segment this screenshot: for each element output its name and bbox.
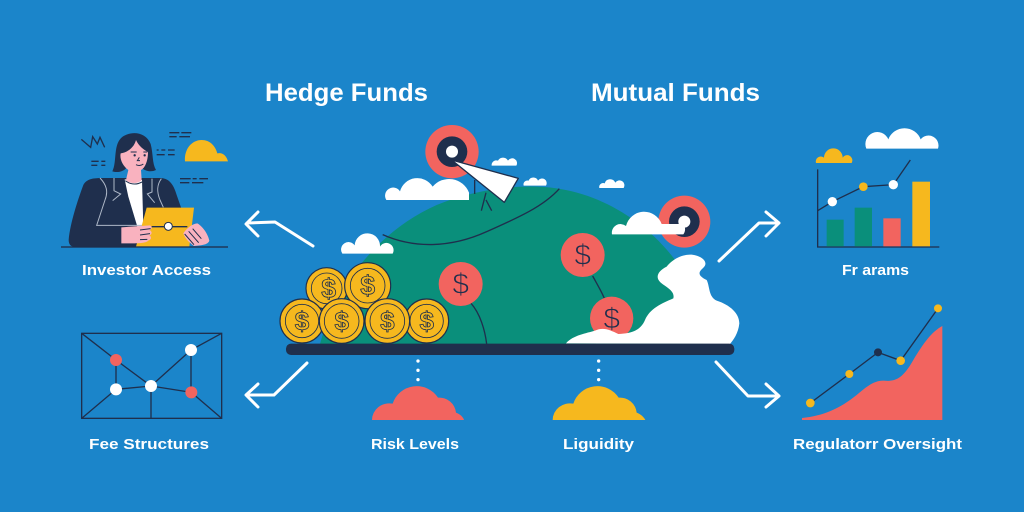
- dollar badges: $: [603, 302, 620, 335]
- white blob cloud: [566, 255, 739, 344]
- coin front 3: $: [380, 306, 395, 336]
- clouds: [816, 128, 938, 163]
- arrow: to investor access: [246, 212, 313, 246]
- clouds: small: [341, 158, 624, 254]
- woman hair: [112, 133, 156, 172]
- label: Investor Access: Investor Access: [82, 262, 211, 279]
- network lines: [82, 333, 222, 418]
- panel: risk levels: [372, 359, 464, 420]
- coin front 2: $: [334, 306, 349, 336]
- icon: doodle squiggle: [81, 137, 105, 165]
- arrow: to regulatory oversight: [716, 362, 779, 407]
- title: Mutual Funds: Mutual Funds: [591, 79, 760, 107]
- icon: text dashes: [157, 133, 208, 183]
- icon: yellow cloud: [185, 140, 228, 161]
- label: Fr arams: Fr arams: [842, 262, 909, 279]
- panel: liquidity: [553, 359, 645, 420]
- dotted connector: [416, 359, 420, 381]
- coin back left: $: [321, 273, 336, 303]
- panel: central hill scene: [280, 125, 739, 355]
- panel: frameworks bar chart: [816, 128, 939, 247]
- coin back left: [306, 268, 347, 309]
- title: Hedge Funds: Hedge Funds: [265, 79, 428, 107]
- dollar badges: $: [452, 268, 469, 301]
- label: Fee Structures: Fee Structures: [89, 436, 209, 453]
- network nodes: [110, 344, 197, 398]
- panel: fee structures network diagram: [82, 333, 222, 418]
- woman facial features: [125, 152, 147, 184]
- target: right: [658, 196, 710, 248]
- dollar connector lines: [471, 276, 604, 344]
- woman shirt: [125, 179, 143, 227]
- bars: [827, 182, 930, 246]
- coin front 1: [280, 299, 324, 343]
- coin front 1: $: [295, 306, 310, 336]
- woman face: [120, 140, 148, 183]
- base bar: [286, 344, 734, 355]
- telescope stand: [475, 180, 492, 211]
- hand right: [183, 223, 209, 246]
- coin back right: [345, 263, 391, 309]
- coin front 3: [365, 299, 410, 343]
- dollar badges: $: [574, 239, 591, 272]
- chart axes: [818, 169, 939, 247]
- clipboard: [136, 208, 194, 247]
- hand left: [121, 225, 152, 243]
- coin far right: [405, 299, 449, 343]
- desk line: [61, 246, 228, 248]
- trend line: [806, 304, 942, 407]
- clasp: [152, 225, 187, 229]
- woman jacket: [69, 178, 181, 247]
- green hill: [320, 186, 703, 344]
- panel: regulatory oversight area chart: [802, 304, 942, 420]
- arrow: to fee structures: [246, 363, 307, 407]
- red area: [802, 326, 942, 420]
- dollar badges: [439, 233, 633, 340]
- target: top: [425, 125, 479, 178]
- jacket outlines: [97, 178, 163, 225]
- cloud: right: [612, 212, 685, 234]
- coin far right: $: [419, 306, 434, 336]
- dotted connector: [597, 359, 600, 381]
- finger lines: [140, 229, 201, 245]
- cloud: left top: [385, 178, 469, 200]
- label: Liguidity: Liguidity: [563, 436, 635, 453]
- arrow: to frameworks: [719, 212, 779, 261]
- icon: red cloud: [372, 386, 464, 420]
- label: Regulatorr Oversight: Regulatorr Oversight: [793, 436, 962, 453]
- coin back right: $: [360, 271, 375, 301]
- icon: yellow cloud: [553, 386, 645, 420]
- trend line: [818, 160, 910, 211]
- coin stack: [280, 263, 449, 343]
- panel: investor access illustration: [61, 133, 228, 248]
- label: Risk Levels: Risk Levels: [371, 436, 459, 453]
- telescope cone: [452, 160, 518, 202]
- hill curve: [383, 189, 559, 245]
- coin front 2: [319, 299, 364, 343]
